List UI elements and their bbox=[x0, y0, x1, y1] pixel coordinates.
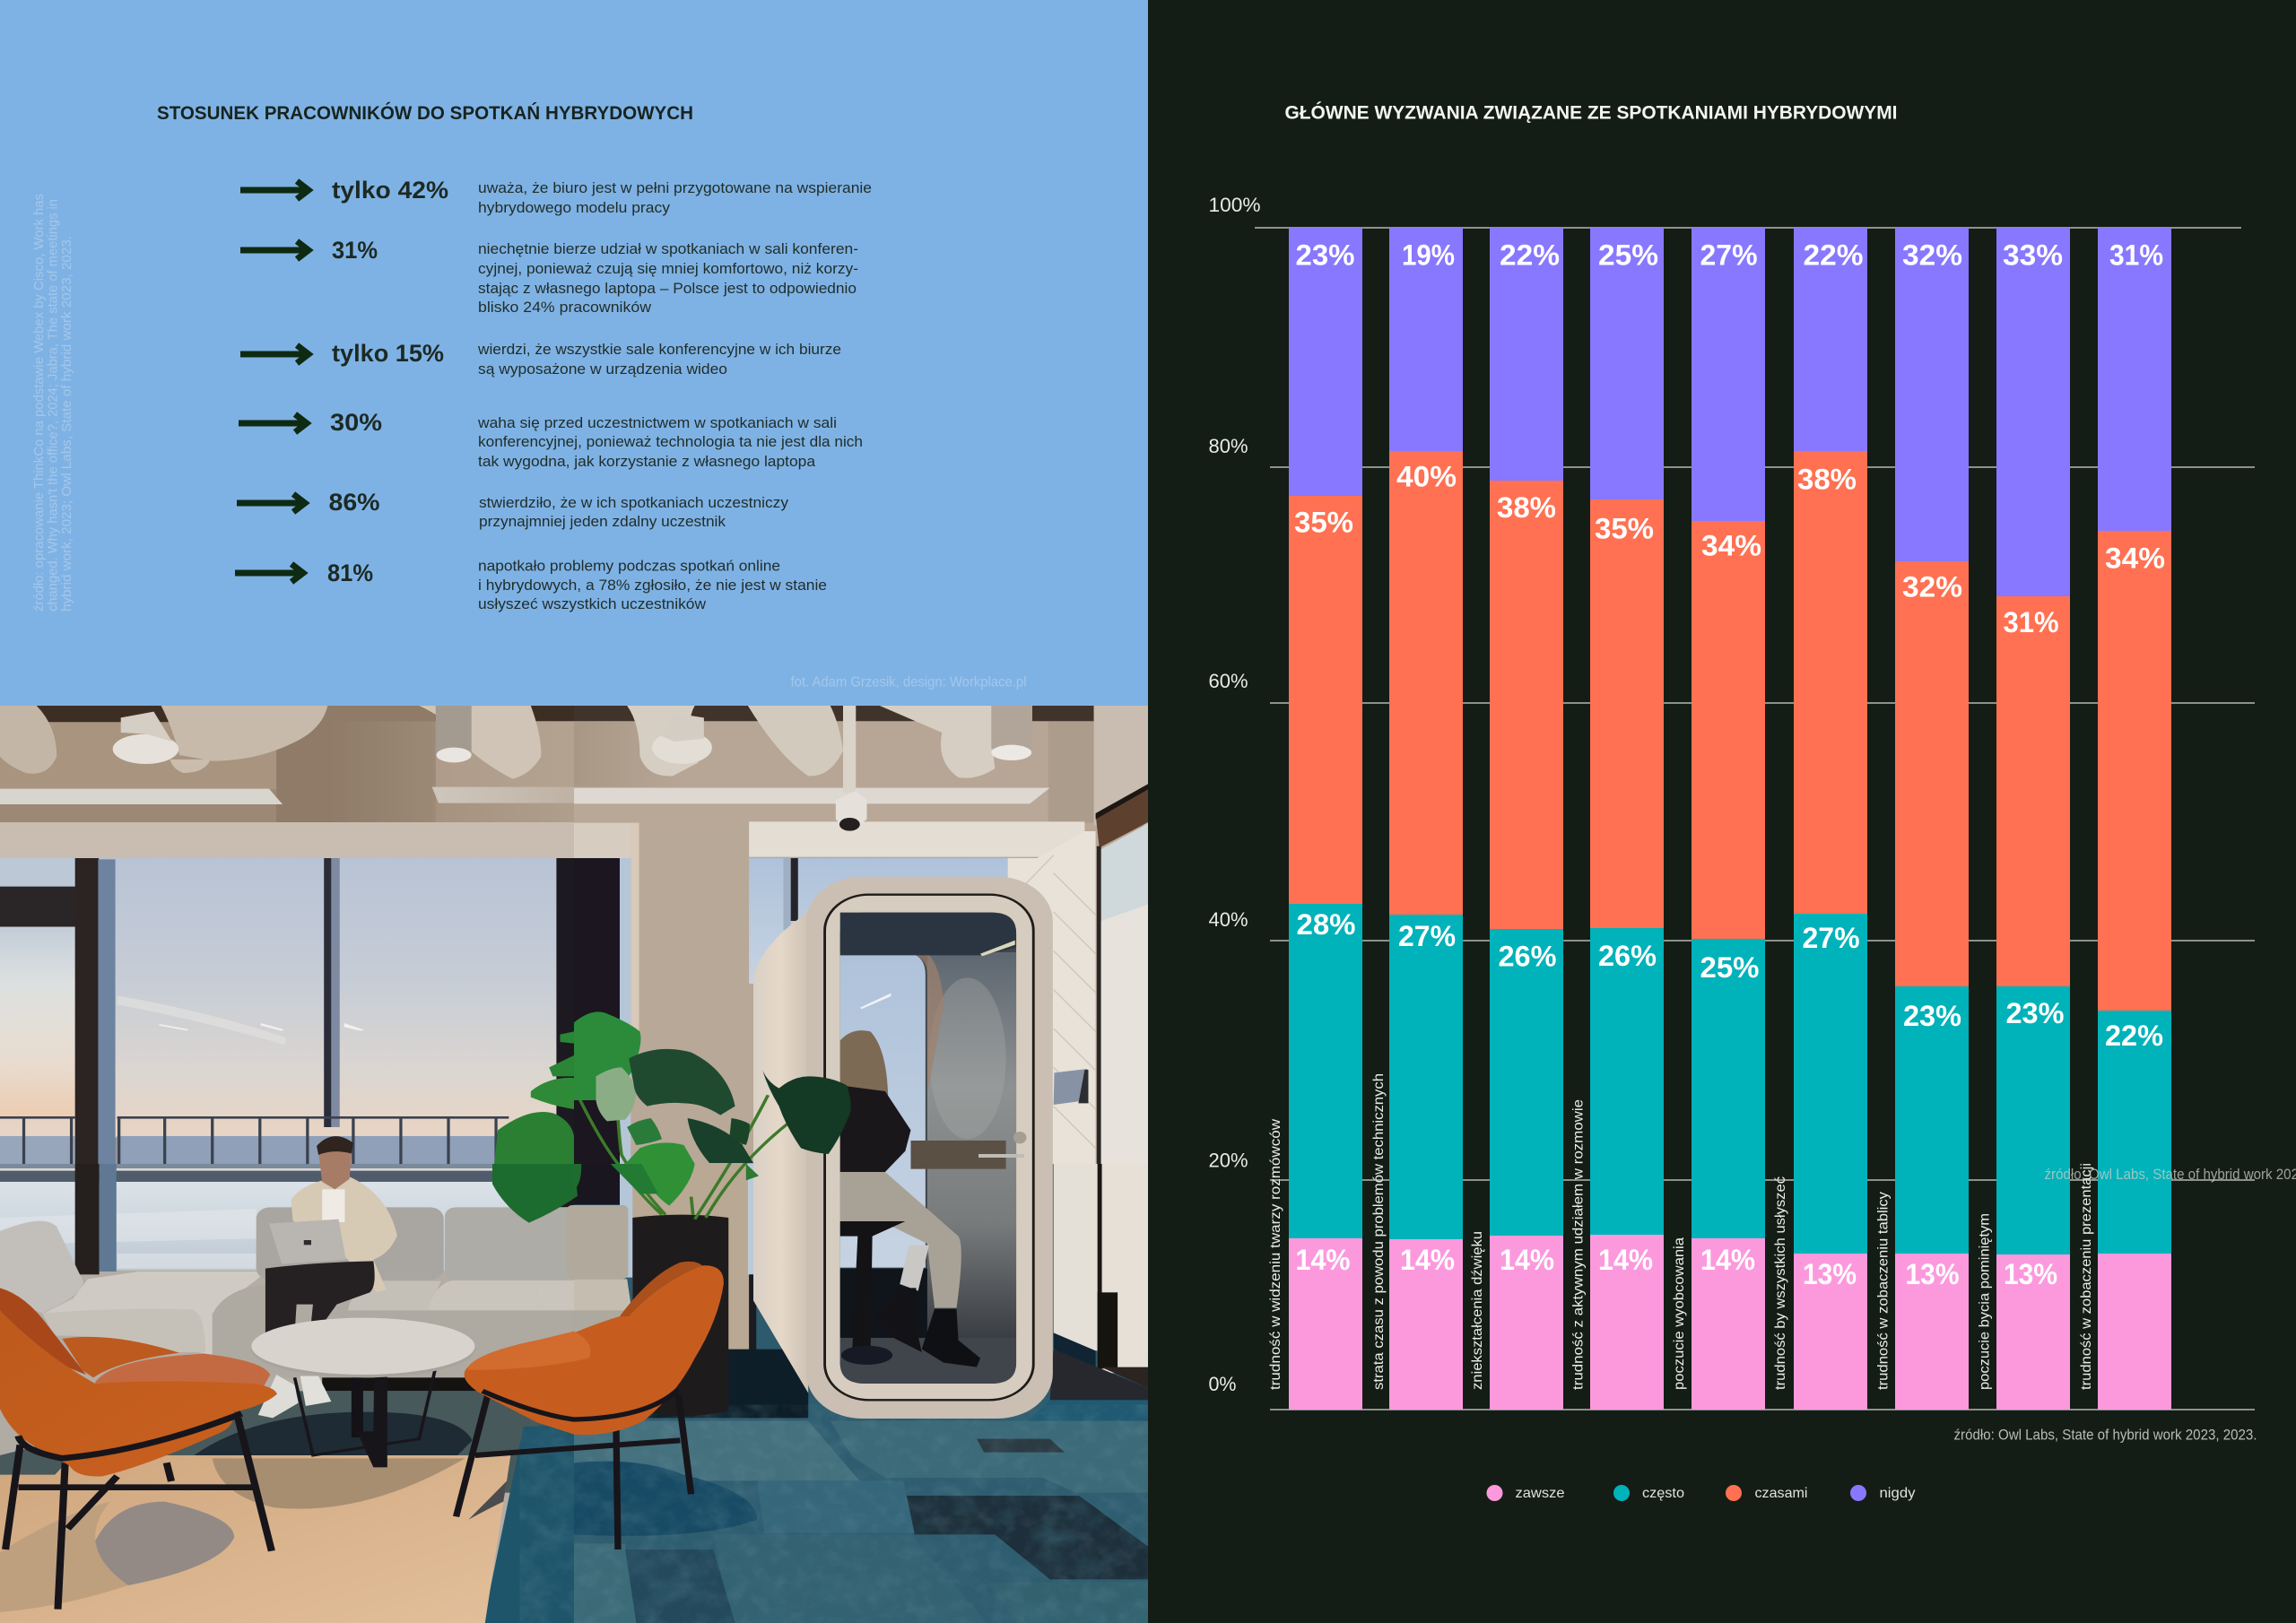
bar 2: 14% bbox=[1400, 1244, 1455, 1276]
rotated category labels: strata czasu z powodu problemów technicznych bbox=[1371, 1073, 1387, 1390]
bar 2: 40% bbox=[1396, 461, 1457, 493]
stat row: 81%: 81% bbox=[327, 560, 373, 586]
y axis grid lines and labels: 20% bbox=[1209, 1150, 1248, 1171]
stat row: 15% bbox=[240, 340, 841, 378]
ceiling and right wall bbox=[574, 706, 1148, 1166]
stat row: 42% bbox=[240, 177, 872, 216]
bar 4: 26% bbox=[1598, 940, 1657, 972]
terrace and sofa bbox=[0, 1164, 574, 1623]
stat row: 81% bbox=[235, 558, 827, 612]
chart heading: GŁÓWNE WYZWANIA ZWIĄZANE ZE SPOTKANIAMI HYBRYDOWYMI bbox=[1284, 102, 1898, 124]
stat row: 31% bbox=[240, 237, 858, 316]
rotated category labels: trudność z aktywnym udziałem w rozmowie bbox=[1571, 1099, 1586, 1390]
coffee table bbox=[251, 1318, 475, 1467]
stat row: 31%: blisko 24% pracowników bbox=[478, 299, 652, 316]
sofa, right part and column base bbox=[567, 1164, 1148, 1397]
bar 2: 27% bbox=[1398, 920, 1456, 952]
y axis grid lines and labels: 100% bbox=[1209, 194, 1261, 216]
rotated category labels: zniekształcenia dźwięku bbox=[1470, 1231, 1485, 1390]
y axis grid lines and labels: 80% bbox=[1209, 435, 1248, 457]
bar 1 bbox=[1289, 228, 1362, 1410]
rotated category labels: trudność w widzeniu twarzy rozmówców bbox=[1268, 1119, 1283, 1390]
bar 5: 27% bbox=[1700, 239, 1758, 271]
bar 5: 34% bbox=[1701, 529, 1761, 561]
bar 6 bbox=[1794, 228, 1867, 1410]
bar 1: 23% bbox=[1295, 239, 1354, 271]
bar 5: 25% bbox=[1700, 951, 1760, 984]
legend: nigdy bbox=[1880, 1486, 1916, 1501]
stat row: 86%: przynajmniej jeden zdalny uczestnik bbox=[479, 513, 726, 530]
bar 6: 27% bbox=[1803, 922, 1860, 954]
bar 8 bbox=[1996, 228, 2070, 1410]
bar 1: 35% bbox=[1294, 506, 1353, 538]
rotated category labels: trudność by wszystkich usłyszeć bbox=[1773, 1176, 1788, 1390]
phone booth bbox=[753, 877, 1053, 1419]
rotated category labels: poczucie bycia pominiętym bbox=[1977, 1213, 1993, 1390]
stat row: 42%: tylko 42% bbox=[332, 177, 448, 204]
photo: office lounge with phone booth bbox=[0, 706, 1148, 1623]
source note: rotated: hybrid work, 2023; Owl Labs, State of hybrid work 2023, 2023. bbox=[59, 236, 74, 612]
bar 8: 23% bbox=[2005, 997, 2065, 1029]
right orange chair bbox=[457, 1262, 724, 1549]
stat row: 42%: hybrydowego modelu pracy bbox=[478, 199, 671, 216]
bar 6: 13% bbox=[1803, 1258, 1857, 1290]
man with laptop bbox=[258, 1136, 397, 1418]
bar 7: 32% bbox=[1902, 570, 1962, 603]
bar 9: 31% bbox=[2109, 239, 2163, 271]
stat row: 30%: tak wygodna, jak korzystanie z własnego laptopa bbox=[478, 453, 816, 470]
source note: rotated: changed. Why hasn't the office?, 2024; Jabra, The state of meetings in bbox=[45, 199, 61, 612]
bar 1: 28% bbox=[1297, 908, 1356, 941]
bar 5: 14% bbox=[1700, 1244, 1755, 1276]
bar 4: 35% bbox=[1595, 513, 1654, 545]
bar 2 bbox=[1389, 228, 1463, 1410]
stat row: 30%: 30% bbox=[330, 409, 382, 436]
bar 6: 38% bbox=[1797, 463, 1857, 495]
rotated category labels: poczucie wyobcowania bbox=[1672, 1237, 1687, 1390]
bar 9 bbox=[2098, 228, 2171, 1410]
bar 4: 14% bbox=[1598, 1244, 1653, 1276]
rotated category labels bbox=[1268, 1073, 2094, 1390]
legend bbox=[1487, 1485, 1916, 1501]
bar 7 bbox=[1895, 228, 1969, 1410]
stat row: 30%: waha się przed uczestnictwem w spotkaniach w sali bbox=[477, 414, 837, 431]
bar 1: 14% bbox=[1295, 1244, 1351, 1276]
wall tone blend bbox=[387, 721, 624, 822]
stat row: 15%: wierdzi, że wszystkie sale konferencyjne w ich biurze bbox=[477, 341, 841, 358]
ceiling and window wall, left bbox=[0, 706, 574, 1167]
bar 8: 13% bbox=[2004, 1258, 2057, 1290]
bar 3: 22% bbox=[1500, 239, 1560, 271]
stat row: 86%: 86% bbox=[328, 489, 380, 516]
stat row: 30% bbox=[239, 409, 863, 470]
carpet texture bbox=[520, 1405, 1148, 1623]
stat row: 31%: stając z własnego laptopa – Polsce jest to odpowiednio bbox=[478, 280, 857, 297]
bar 4 bbox=[1590, 228, 1664, 1410]
legend: zawsze bbox=[1516, 1486, 1565, 1501]
bar 2: 19% bbox=[1402, 239, 1455, 271]
source note: rotated bbox=[31, 194, 74, 612]
bar 3: 26% bbox=[1498, 940, 1557, 972]
bar 5 bbox=[1692, 228, 1765, 1410]
floor bbox=[0, 1350, 1148, 1623]
bar 9: 22% bbox=[2105, 1020, 2163, 1052]
y axis grid lines and labels: 40% bbox=[1209, 908, 1248, 931]
plant pot bbox=[632, 1215, 728, 1416]
bar 9: 34% bbox=[2105, 542, 2165, 574]
left orange chair bbox=[0, 1288, 277, 1610]
panel: background dark bbox=[1148, 0, 2296, 1623]
stat row: 81%: usłyszeć wszystkich uczestników bbox=[478, 595, 707, 612]
panel: employee attitudes bbox=[0, 0, 1148, 706]
ducts and lights, left bbox=[0, 706, 541, 779]
rotated category labels: trudność w zobaczeniu prezentacji bbox=[2079, 1163, 2094, 1390]
monstera plant bbox=[492, 1011, 851, 1223]
stat row: 81%: napotkało problemy podczas spotkań online bbox=[478, 558, 780, 574]
stat row: 86%: stwierdziło, że w ich spotkaniach uczestniczy bbox=[479, 494, 789, 511]
legend: często bbox=[1642, 1486, 1684, 1501]
stat row: 42%: uważa, że biuro jest w pełni przygotowane na wspieranie bbox=[478, 179, 872, 196]
y axis grid lines and labels bbox=[1209, 194, 2255, 1410]
bar 4: 25% bbox=[1598, 239, 1658, 271]
chart: stacked bars bbox=[1209, 194, 2255, 1410]
carpet highlights bbox=[520, 1405, 1148, 1623]
stat row: 31%: niechętnie bierze udział w spotkaniach w sali konferen- bbox=[478, 240, 858, 257]
source note: rotated: źródło: opracowanie ThinkCo na podstawie Webex by Cisco, Work has bbox=[31, 194, 47, 612]
bar 7: 23% bbox=[1903, 1000, 1961, 1032]
bar 6: 22% bbox=[1803, 239, 1864, 271]
bar 7: 32% bbox=[1902, 239, 1962, 271]
photo credit: fot. Adam Grzesik, design: Workplace.pl bbox=[791, 674, 1026, 690]
bar 3: 14% bbox=[1500, 1244, 1554, 1276]
bar 8: 31% bbox=[2004, 606, 2059, 638]
y axis grid lines and labels: 60% bbox=[1209, 670, 1248, 692]
stat row: 15%: tylko 15% bbox=[332, 340, 444, 367]
y axis grid lines and labels: 0% bbox=[1209, 1373, 1236, 1395]
heading: attitudes: STOSUNEK PRACOWNIKÓW DO SPOTKAŃ HYBRYDOWYCH bbox=[157, 102, 693, 124]
source note: źródło: Owl Labs, State of hybrid work 2023, 2023. bbox=[1953, 1426, 2257, 1444]
bar 3: 38% bbox=[1497, 491, 1556, 524]
legend: czasami bbox=[1754, 1486, 1808, 1501]
bar 8: 33% bbox=[2003, 239, 2063, 271]
stat row: 86% bbox=[237, 489, 789, 530]
bar 7: 13% bbox=[1905, 1258, 1959, 1290]
stat row: 81%: i hybrydowych, a 78% zgłosiło, że nie jest w stanie bbox=[478, 577, 827, 594]
bar 3 bbox=[1490, 228, 1563, 1410]
rotated category labels: trudność w zobaczeniu tablicy bbox=[1876, 1192, 1891, 1390]
stat row: 31%: cyjnej, ponieważ czują się mniej komfortowo, niż korzy- bbox=[478, 260, 858, 277]
ducts and lights, right bbox=[627, 706, 1032, 833]
stat row: 15%: są wyposażone w urządzenia wideo bbox=[478, 360, 727, 378]
stat row: 31%: 31% bbox=[332, 237, 378, 264]
stat row: 30%: konferencyjnej, ponieważ technologia ta nie jest dla nich bbox=[478, 433, 863, 450]
woman in booth bbox=[840, 1030, 1026, 1367]
